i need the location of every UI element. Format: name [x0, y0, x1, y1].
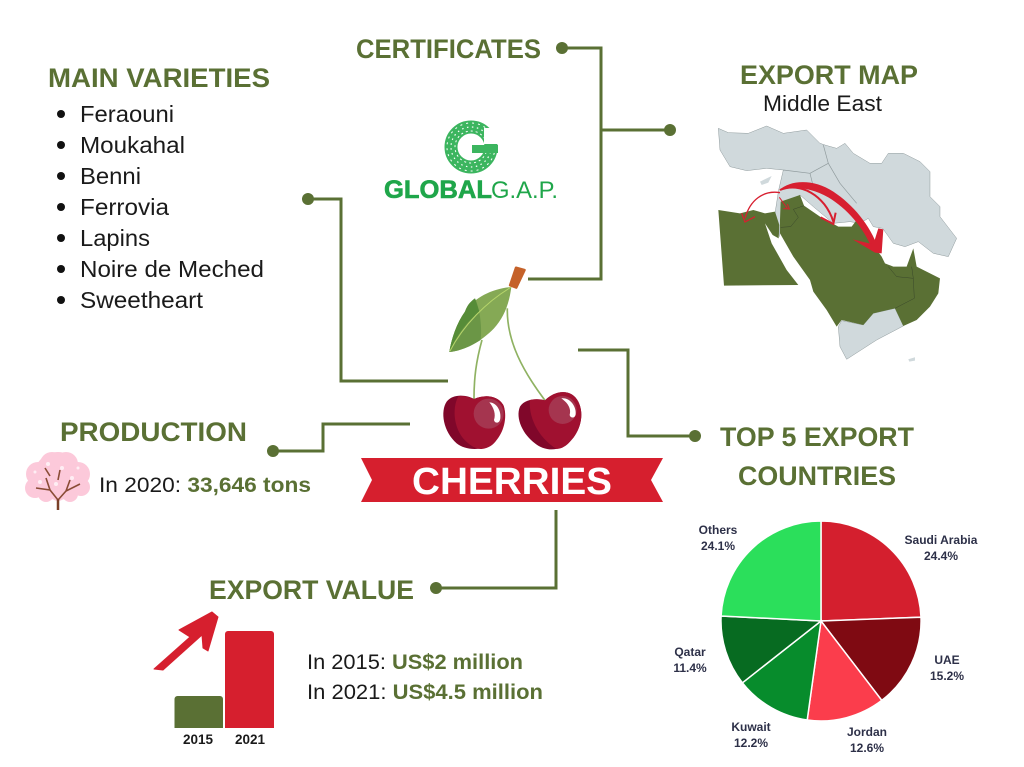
pie labels: Saudi Arabia	[905, 533, 978, 547]
list: cherry varieties: Lapins	[80, 225, 150, 251]
list: cherry varieties: Noire de Meched	[80, 256, 264, 282]
stem cap	[510, 268, 525, 288]
pie labels: 11.4%	[673, 661, 707, 675]
pie labels: UAE	[934, 653, 960, 667]
pie labels: Jordan	[847, 725, 887, 739]
heading: export value: EXPORT VALUE	[209, 575, 414, 605]
heading: export map: EXPORT MAP	[740, 60, 918, 90]
pie labels: Qatar	[674, 645, 706, 659]
pie labels: 24.1%	[701, 539, 735, 553]
icon: cherry blossom tree	[25, 452, 90, 510]
bar chart: export value: 2021	[235, 732, 266, 747]
pie labels: Others	[699, 523, 738, 537]
list: cherry varieties: Moukahal	[80, 132, 185, 158]
heading: top 5 export countries	[720, 422, 914, 491]
stems	[474, 308, 545, 400]
pie chart: export share	[721, 521, 921, 721]
pie labels: 12.6%	[850, 741, 884, 755]
pie labels	[673, 523, 978, 755]
text: export values: In 2021: US$4.5 million	[307, 681, 543, 704]
connector: certificates to cherries and export map	[528, 42, 676, 279]
logo: GLOBALG.A.P.: G.A.P.	[491, 177, 558, 204]
list: cherry varieties: Ferrovia	[80, 194, 169, 220]
text: production figure: In 2020: 33,646 tons	[99, 474, 311, 497]
pie labels: 12.2%	[734, 736, 768, 750]
subheading: middle east: Middle East	[763, 91, 882, 116]
bar chart: export value: 2015	[183, 732, 214, 747]
banner: cherries title	[361, 458, 663, 503]
pie labels: 15.2%	[930, 669, 964, 683]
heading: top 5 export countries: COUNTRIES	[738, 461, 896, 491]
connector: top 5 export countries	[578, 350, 701, 442]
right cherry	[519, 392, 581, 449]
map: Middle East export routes	[718, 126, 957, 362]
heading: certificates: CERTIFICATES	[356, 34, 541, 64]
connector: main varieties	[302, 193, 448, 381]
list: cherry varieties: Benni	[80, 163, 141, 189]
logo: GLOBALG.A.P.: GLOBAL	[384, 176, 492, 204]
heading: top 5 export countries: TOP 5 EXPORT	[720, 422, 914, 452]
left cherry	[443, 396, 505, 449]
text: export values: In 2015: US$2 million	[307, 651, 523, 674]
list: cherry varieties: Feraouni	[80, 101, 174, 127]
pie labels: Kuwait	[731, 720, 771, 734]
list: cherry varieties: Sweetheart	[80, 287, 204, 313]
text: export values	[307, 651, 543, 704]
pie labels: 24.4%	[924, 549, 958, 563]
banner: cherries title: CHERRIES	[412, 461, 612, 503]
arrow: rising value	[154, 612, 218, 670]
leaf	[449, 287, 511, 352]
heading: main varieties: MAIN VARIETIES	[48, 63, 270, 93]
list: cherry varieties	[57, 101, 264, 313]
connector: production	[267, 424, 410, 457]
bar chart: export value	[174, 631, 274, 747]
heading: production: PRODUCTION	[60, 417, 247, 447]
illustration: cherries with leaf	[443, 268, 581, 449]
connector: export value	[430, 510, 556, 594]
logo: GLOBALG.A.P.	[384, 123, 558, 204]
